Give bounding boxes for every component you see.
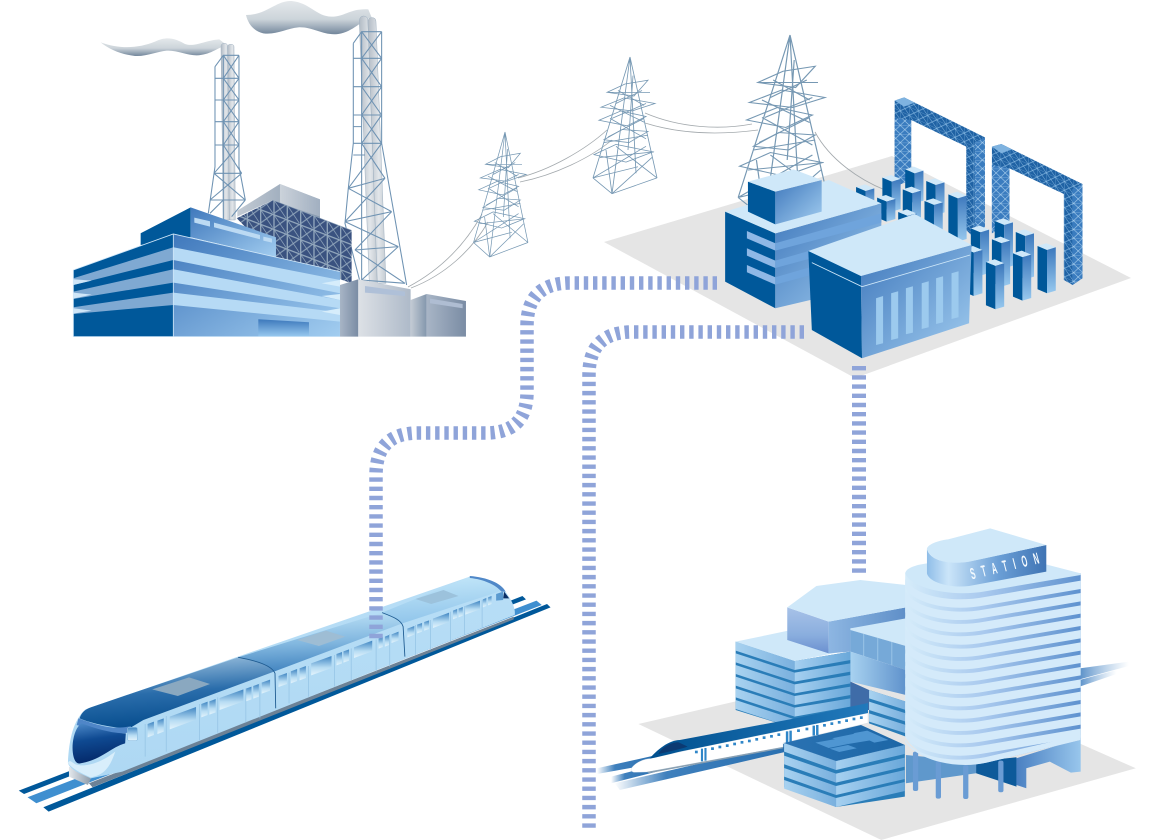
rear cap [470, 576, 509, 601]
steel gantry 1 [895, 97, 985, 240]
power line: last pylon to substation [815, 132, 885, 190]
power lines: plant to first pylon [408, 113, 758, 288]
auxiliary gray buildings [340, 279, 466, 337]
steel gantry 2 [992, 144, 1082, 285]
support columns [913, 752, 1003, 799]
cab band and windshield [68, 718, 137, 777]
transmission pylon 1 [474, 132, 528, 257]
substation ground plate [604, 156, 1131, 378]
main building: left face [73, 234, 173, 337]
main building: right face [73, 234, 340, 337]
roof car 2 [238, 613, 402, 672]
roof equipment [152, 590, 459, 696]
smoke plume: large chimney [246, 1, 372, 34]
small chimney with lattice [208, 43, 245, 220]
transformer columns: front row [986, 218, 1056, 309]
scene: railway station [597, 528, 1136, 840]
front lower block [784, 725, 905, 807]
smoke plume: small chimney [101, 38, 227, 56]
dotted connector: substation to station (short route) [852, 366, 866, 574]
high-speed rail tracks [597, 662, 1129, 790]
station ground plate [638, 663, 1136, 840]
transformer columns: rear row [856, 167, 989, 296]
scene: substation [725, 97, 1082, 358]
glass bridge [850, 618, 906, 710]
roof cap with station sign [927, 528, 1046, 586]
rear stepped block [736, 631, 850, 728]
side windows [148, 596, 492, 737]
dotted connector: substation to commuter train [376, 283, 717, 640]
middle stack behind tower [869, 690, 906, 737]
scene: power plant [73, 1, 466, 337]
transmission pylon 2 [593, 57, 657, 194]
curved station tower [905, 550, 1081, 765]
door lines and car seams [145, 600, 482, 757]
large chimney with lattice [345, 16, 407, 285]
roof car 1 [79, 657, 274, 728]
upper block of main building [141, 207, 276, 257]
gray lattice building [237, 184, 352, 283]
control building [725, 169, 881, 308]
roof car 3 [382, 577, 502, 623]
station sign text: STATION [968, 549, 1041, 583]
main substation hall [808, 214, 972, 358]
dotted connector: substation to station (long route) [589, 332, 804, 828]
transmission pylon 3 [738, 35, 828, 219]
entrance and tower base [906, 738, 1081, 788]
train underframe [69, 617, 514, 787]
scene: commuter train [19, 576, 551, 812]
shinkansen train [631, 703, 868, 773]
octagonal upper block [787, 580, 906, 653]
train body [68, 577, 515, 778]
rails [19, 596, 551, 812]
